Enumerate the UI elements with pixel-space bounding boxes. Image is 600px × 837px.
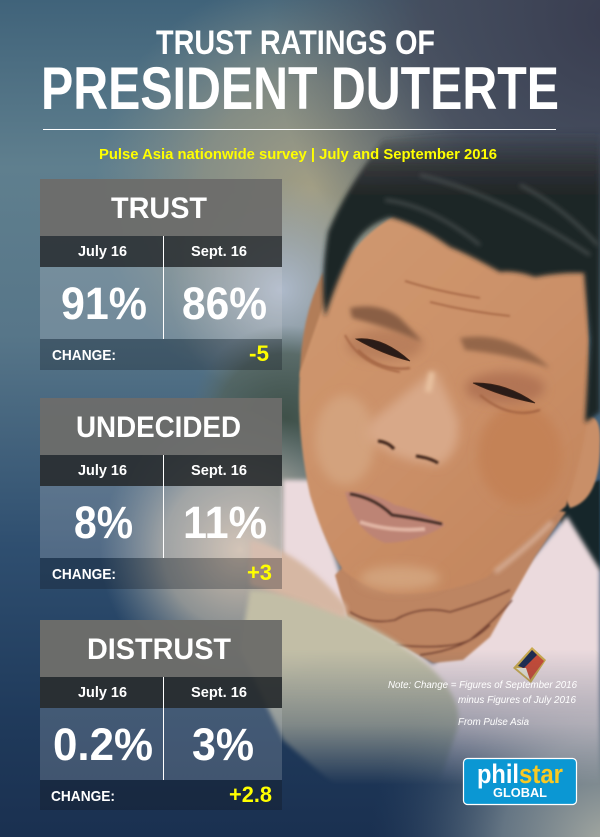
panel: undecided: 8% [74, 497, 133, 548]
mouth [345, 492, 445, 543]
neck [335, 500, 566, 663]
eyes [356, 339, 410, 361]
note text [388, 680, 577, 728]
note text: From Pulse Asia [458, 717, 529, 728]
panel: distrust [40, 620, 282, 810]
panel: undecided: July 16 [78, 462, 127, 479]
logo: philstar global [464, 758, 576, 804]
panel: distrust: 0.2% [53, 719, 153, 770]
note text: Note: Change = Figures of September 2016 [388, 680, 577, 691]
face [299, 215, 590, 594]
title [41, 24, 559, 122]
panel: distrust: +2.8 [229, 782, 272, 807]
panel: undecided: UNDECIDED [76, 411, 241, 444]
logo: philstar global: star [519, 759, 563, 789]
subtitle: Pulse Asia nationwide survey | July and September 2016 [99, 146, 497, 163]
sleeve [240, 590, 458, 790]
panel: undecided: CHANGE: [52, 566, 116, 583]
title: TRUST RATINGS OF [156, 24, 435, 62]
eyebrows [350, 306, 422, 342]
panel: distrust: 3% [192, 719, 254, 770]
panel: trust: 86% [182, 278, 267, 329]
panel: trust: July 16 [78, 243, 127, 260]
nose [367, 370, 459, 465]
jaw highlight [495, 522, 552, 572]
panel: undecided: 11% [183, 497, 267, 548]
photo: President Duterte portrait [240, 130, 600, 800]
panel: distrust: Sept. 16 [191, 684, 247, 701]
panel: trust: CHANGE: [52, 347, 116, 364]
panel: trust: TRUST [111, 192, 207, 225]
finger [250, 540, 347, 618]
panel: distrust: CHANGE: [51, 788, 115, 805]
panel: distrust: July 16 [78, 684, 127, 701]
panel: trust [40, 179, 282, 370]
panel: trust: 91% [61, 278, 147, 329]
lapel pin [513, 647, 546, 683]
logo: philstar global: phil [477, 759, 519, 789]
note text: minus Figures of July 2016 [458, 695, 576, 706]
logo: philstar global: GLOBAL [493, 786, 547, 800]
panel: trust: Sept. 16 [191, 243, 247, 260]
hair [323, 130, 600, 423]
dark background behind collar [555, 480, 600, 572]
ears [298, 272, 326, 378]
panel: undecided: +3 [247, 560, 272, 585]
panel: trust: -5 [249, 341, 269, 366]
panel: undecided [40, 398, 282, 589]
panel: undecided: Sept. 16 [191, 462, 247, 479]
shading blobs [315, 395, 375, 485]
shirt [283, 480, 600, 800]
wrinkles [345, 281, 510, 372]
panel: distrust: DISTRUST [87, 633, 231, 666]
